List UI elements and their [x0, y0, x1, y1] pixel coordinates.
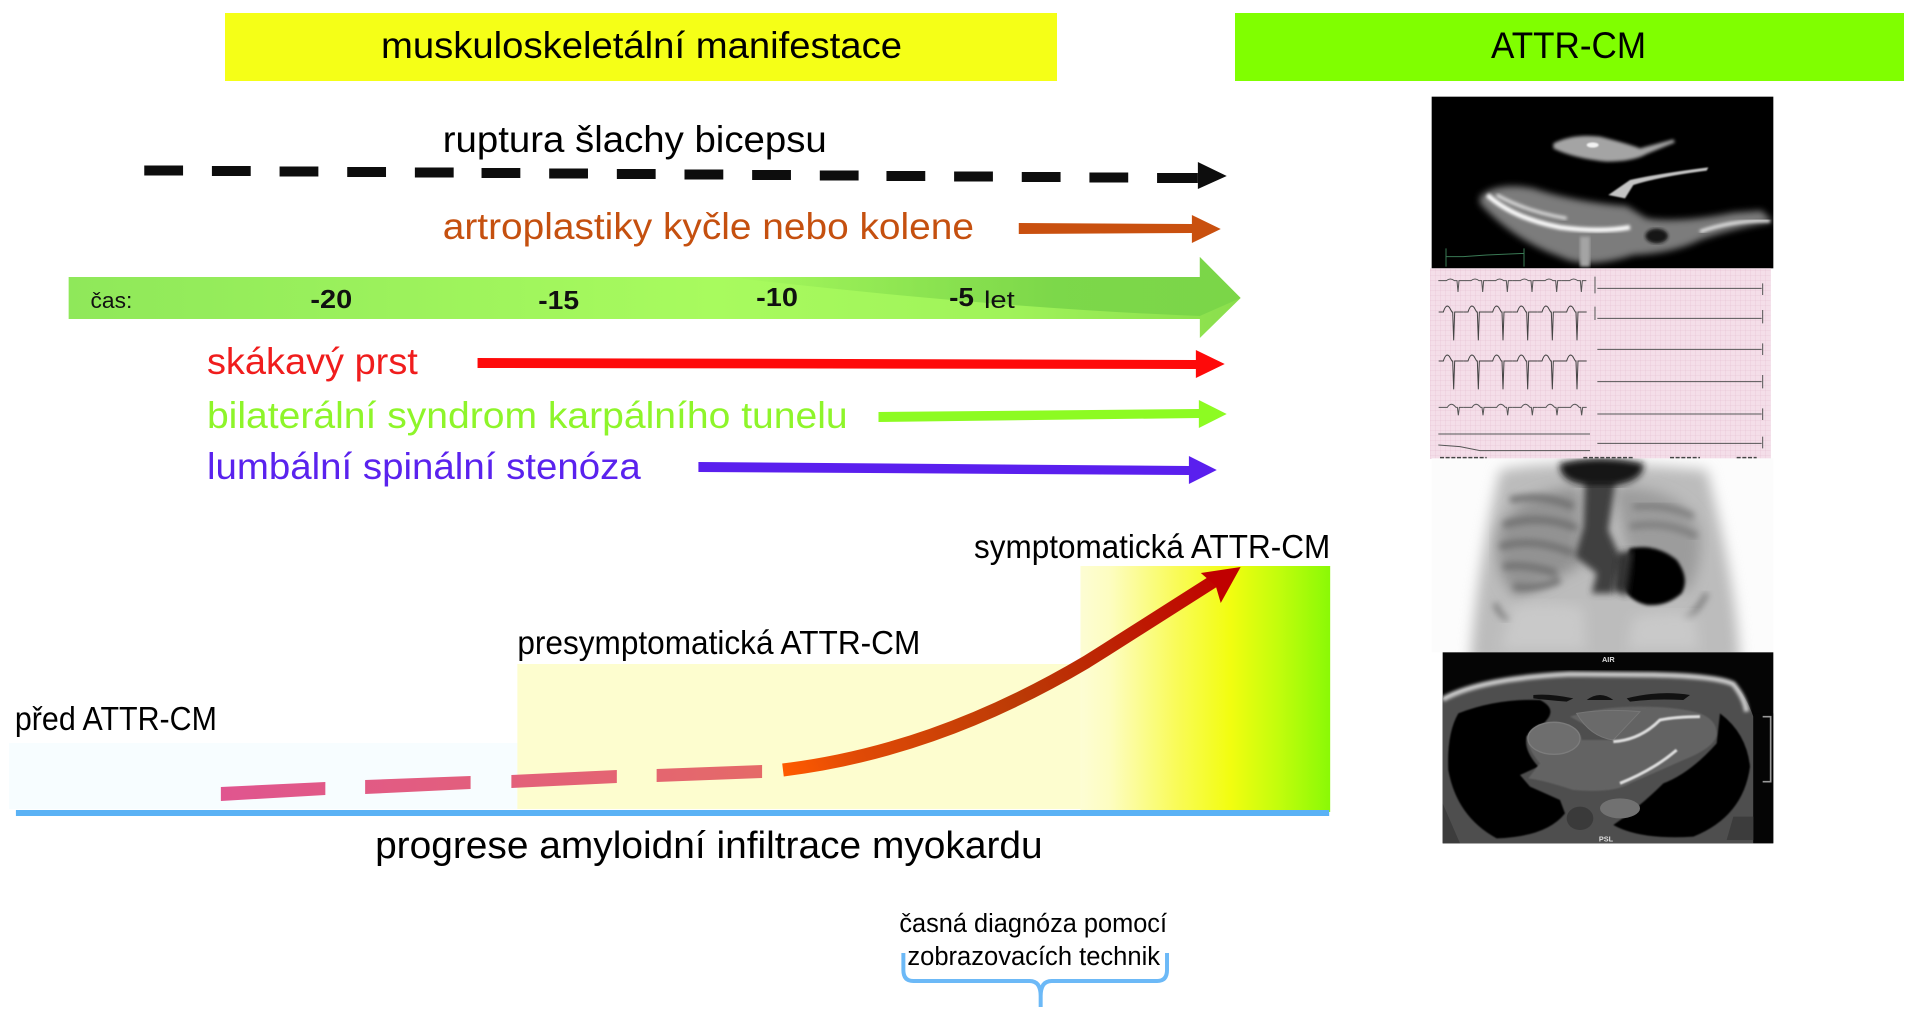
arrow: black dashed: [144, 162, 1227, 189]
image: ECG: [1430, 268, 1771, 459]
axis tick values: -15: [538, 287, 579, 315]
axis tick values: [310, 284, 1015, 315]
stage: presymptomatic box: [517, 664, 1092, 809]
image: cardiac MRI: [1443, 652, 1773, 844]
axis tick values: let: [984, 287, 1015, 314]
dashed progression line: [221, 765, 762, 801]
label: hip or knee arthroplasty: artroplastiky kyčle nebo kolene: [443, 206, 974, 247]
label: presymptomatic: presymptomatická ATTR-CM: [517, 624, 920, 661]
label: trigger finger: skákavý prst: [207, 341, 418, 382]
axis tick values: -20: [310, 286, 352, 314]
timeline diagram: [9, 119, 1330, 1007]
baseline: [16, 810, 1329, 816]
image: cardiac MRI: AIR: [1602, 655, 1615, 664]
label: pre ATTR-CM: před ATTR-CM: [15, 700, 217, 737]
arrow: lumbar stenosis: [698, 456, 1217, 484]
curved progression arrow: [783, 567, 1241, 770]
label: early diagnosis by imaging: [899, 910, 1168, 971]
heading: musculoskeletal manifestations: muskuloskeletální manifestace: [381, 25, 902, 66]
arrow: arthroplasty: [1019, 215, 1221, 243]
stage: pre ATTR-CM box: [9, 743, 517, 809]
bracket: [903, 953, 1167, 1007]
label: lumbar spinal stenosis: lumbální spinální stenóza: [207, 446, 641, 487]
heading: musculoskeletal manifestations: [225, 13, 1057, 81]
stage: symptomatic box: [1080, 566, 1330, 812]
label: early diagnosis by imaging: časná diagnóza pomocí: [899, 910, 1168, 938]
axis tick values: -10: [756, 284, 798, 312]
label: biceps tendon rupture: ruptura šlachy bicepsu: [443, 119, 827, 160]
heading: ATTR-CM: [1235, 13, 1904, 81]
label: bilateral carpal tunnel: bilaterální syndrom karpálního tunelu: [207, 395, 848, 436]
label: early diagnosis by imaging: zobrazovacích technik: [907, 943, 1160, 971]
arrow: carpal tunnel: [878, 400, 1227, 428]
label: symptomatic: symptomatická ATTR-CM: [974, 528, 1330, 565]
axis label: time: čas:: [91, 288, 132, 313]
arrow: trigger finger: [478, 350, 1225, 378]
time axis arrow: [69, 257, 1241, 338]
image: echocardiogram: [1432, 97, 1773, 268]
axis tick values: -5: [949, 284, 974, 312]
label: amyloid infiltration progression: progrese amyloidní infiltrace myokardu: [375, 825, 1043, 867]
image: cardiac MRI: PSL: [1599, 835, 1614, 844]
image: scintigram: [1432, 458, 1773, 663]
heading: ATTR-CM: ATTR-CM: [1491, 25, 1646, 66]
